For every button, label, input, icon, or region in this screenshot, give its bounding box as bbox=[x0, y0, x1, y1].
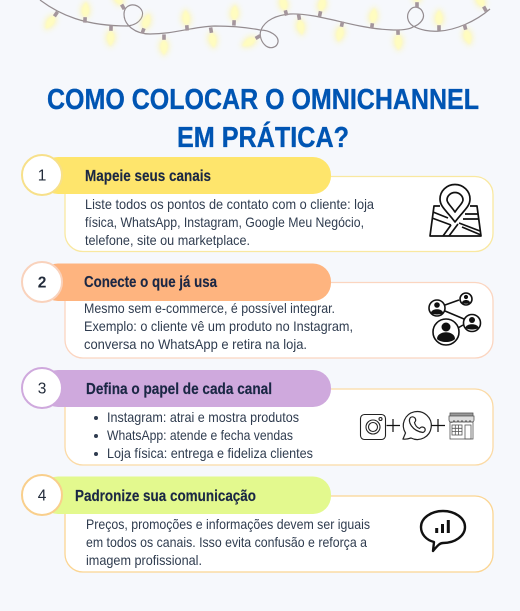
card 2 bbox=[65, 282, 493, 358]
text 1 bbox=[85, 197, 374, 248]
text 4: em todos os canais. Isso evita confusão e reforça a bbox=[86, 535, 367, 550]
heading bar 4 bbox=[40, 476, 331, 514]
number badge 1: 1 bbox=[38, 168, 46, 184]
icon: plus bbox=[432, 419, 445, 432]
text 3: bullets bbox=[94, 410, 313, 461]
text 1: física, WhatsApp, Instagram, Google Meu Negócio, bbox=[85, 215, 364, 230]
heading bar 3 bbox=[40, 370, 331, 407]
number badge 1 bbox=[22, 155, 62, 195]
panel: step 2 bbox=[22, 262, 493, 358]
text 4: imagem profissional. bbox=[86, 553, 202, 568]
icon: map pin bbox=[430, 184, 481, 236]
number badge 2 bbox=[22, 262, 62, 302]
card 1 bbox=[65, 176, 493, 252]
text 4 bbox=[86, 517, 370, 568]
number badge 3 bbox=[22, 368, 62, 408]
icon: shop bbox=[449, 413, 474, 439]
text 3: bullets: Instagram: atrai e mostra produtos bbox=[107, 410, 299, 425]
heading 1: Mapeie seus canais bbox=[85, 168, 211, 185]
icon: plus bbox=[386, 419, 400, 432]
panel: step 4 bbox=[22, 475, 493, 572]
title: EM PRÁTICA? bbox=[177, 122, 349, 154]
text 2: Mesmo sem e-commerce, é possível integrar. bbox=[84, 301, 335, 316]
heading 3: Defina o papel de cada canal bbox=[86, 381, 272, 398]
icon: whatsapp bbox=[403, 412, 431, 440]
text 1: Liste todos os pontos de contato com o cliente: loja bbox=[85, 197, 374, 212]
text 1: telefone, site ou marketplace. bbox=[85, 233, 250, 248]
panel: step 1 bbox=[22, 155, 493, 252]
heading 2: Conecte o que já usa bbox=[84, 274, 217, 291]
text 3: bullets: WhatsApp: atende e fecha vendas bbox=[107, 428, 293, 443]
heading bar 1 bbox=[40, 157, 331, 194]
number badge 4 bbox=[22, 475, 62, 515]
text 4: Preços, promoções e informações devem ser iguais bbox=[86, 517, 370, 532]
number badge 3: 3 bbox=[38, 380, 46, 398]
text 3: bullets: Loja física: entrega e fideliza clientes bbox=[107, 446, 313, 461]
number badge 4: 4 bbox=[38, 488, 47, 504]
panel: step 3 bbox=[22, 368, 493, 465]
heading bar 2 bbox=[40, 264, 331, 301]
card 3 bbox=[65, 389, 493, 465]
icon: network of people bbox=[429, 293, 480, 345]
title bbox=[47, 84, 479, 154]
icon: chat bubble with bars bbox=[421, 511, 465, 551]
icon: instagram bbox=[360, 414, 386, 440]
card 4 bbox=[65, 496, 493, 572]
text 2: Exemplo: o cliente vê um produto no Instagram, bbox=[84, 319, 353, 334]
string lights bbox=[40, 0, 491, 57]
number badge 2: 2 bbox=[38, 274, 46, 292]
text 2 bbox=[84, 301, 353, 352]
text 2: conversa no WhatsApp e retira na loja. bbox=[84, 337, 307, 352]
heading 4: Padronize sua comunicação bbox=[75, 488, 256, 505]
